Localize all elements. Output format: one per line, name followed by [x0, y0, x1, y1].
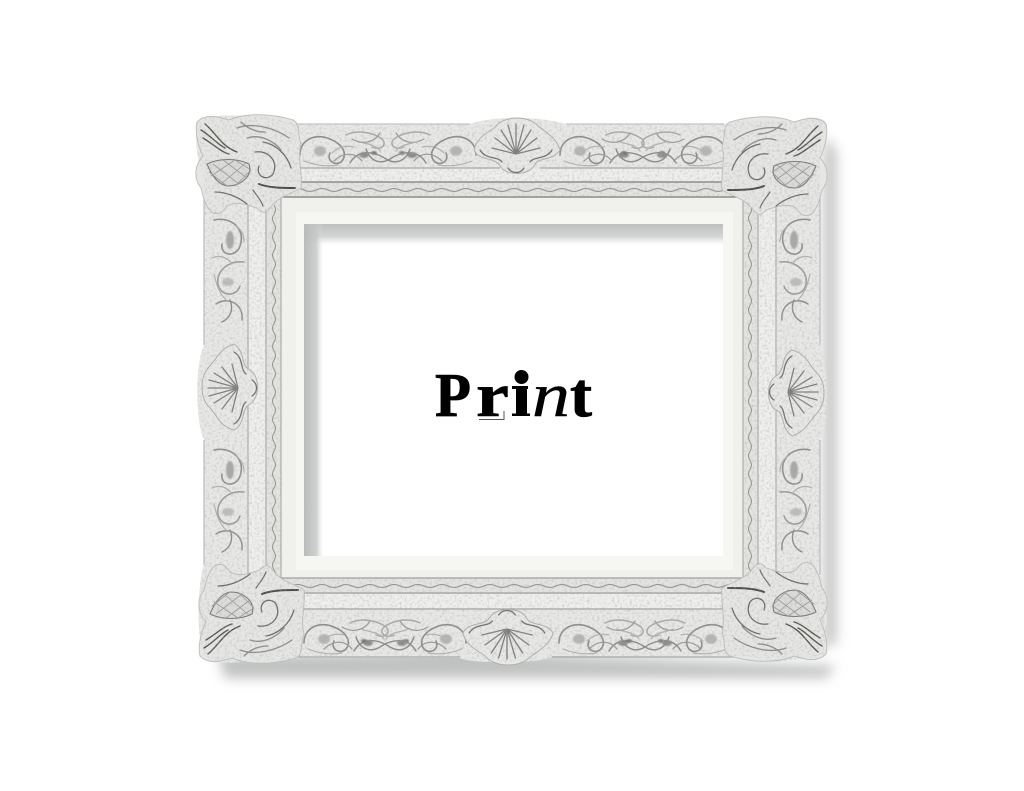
picture frame — [196, 115, 827, 665]
inner shadow top — [304, 224, 723, 245]
shell top — [474, 118, 560, 174]
smooth moulding — [248, 168, 776, 610]
shell right — [768, 350, 824, 436]
beaded moulding — [266, 183, 758, 594]
inner liner — [281, 197, 743, 578]
moulding lines — [204, 124, 820, 657]
right ornament scrolls — [780, 219, 812, 552]
corner ornament top right — [722, 117, 827, 216]
corner ornament bottom left — [199, 564, 304, 663]
letter t: t — [570, 362, 592, 430]
surface grain — [196, 116, 827, 663]
inner shadow left — [304, 224, 323, 556]
top ornament scrolls — [300, 132, 726, 166]
left ornament scrolls — [212, 219, 244, 552]
letter i — [512, 370, 530, 416]
shell bottom — [463, 610, 553, 665]
shell left — [202, 344, 258, 430]
word: Print — [435, 362, 592, 430]
letter n italic: n — [532, 362, 570, 430]
corner ornament bottom right — [722, 562, 827, 661]
beaded details — [268, 188, 760, 588]
frame body — [196, 116, 827, 663]
corner ornament top left — [196, 115, 301, 214]
frame outer drop shadow — [218, 136, 836, 678]
letter r with offset underline: r — [476, 362, 509, 430]
letter P: P — [435, 362, 471, 430]
bottom ornament scrolls — [304, 620, 731, 654]
